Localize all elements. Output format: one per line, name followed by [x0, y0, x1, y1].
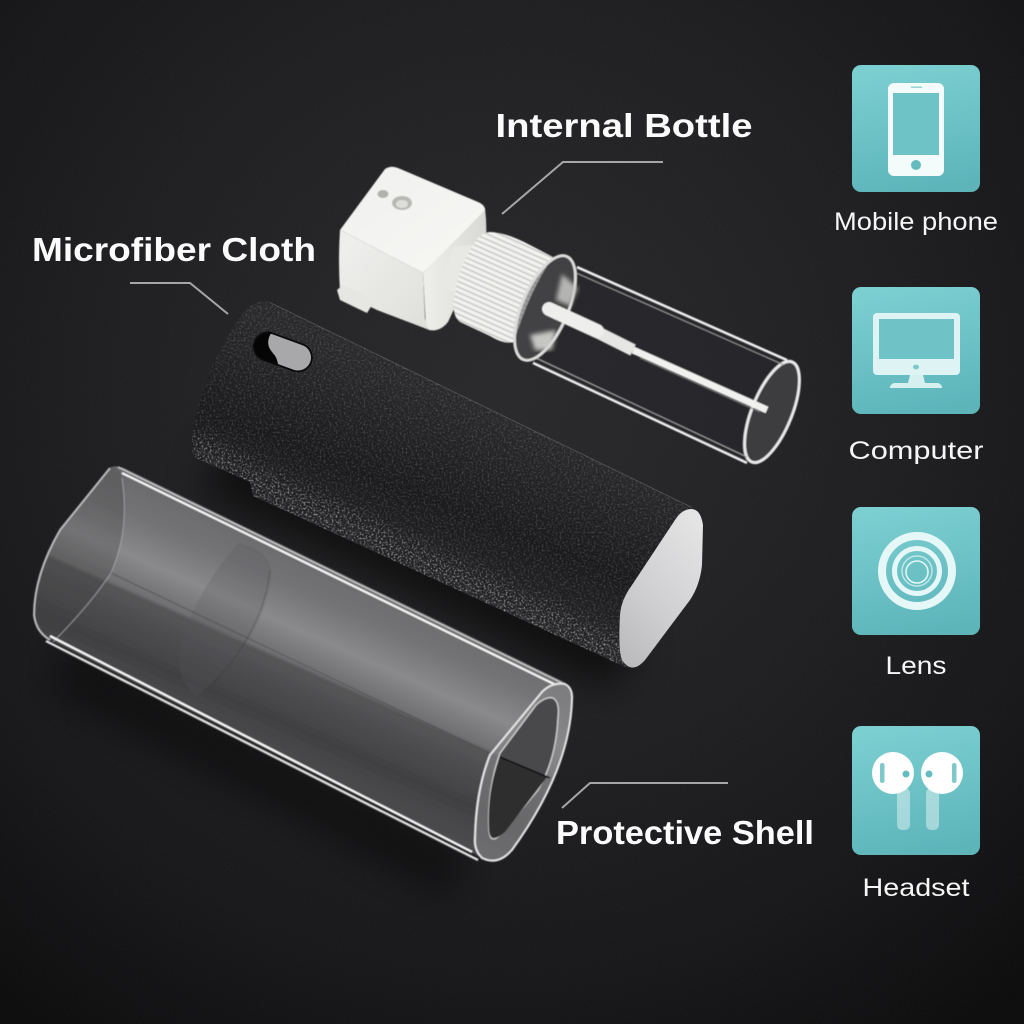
metal end cap — [619, 509, 703, 668]
device: mobile phone — [834, 65, 998, 236]
right side face — [423, 208, 486, 330]
protective shell label — [556, 783, 814, 851]
caption: Mobile phone — [834, 208, 998, 236]
dip straw — [633, 350, 767, 410]
open end — [475, 684, 572, 861]
shell body — [34, 466, 572, 861]
curved inner reflection — [179, 543, 271, 697]
caption: Headset — [862, 874, 970, 902]
caption: Lens — [886, 652, 946, 680]
spray holes — [392, 196, 412, 210]
left end darker panel — [34, 468, 124, 642]
edge lines — [118, 467, 562, 683]
pump head — [337, 167, 486, 331]
top face — [340, 167, 485, 273]
protective shell — [34, 466, 572, 900]
device: lens — [852, 507, 980, 680]
leader line: microfiber cloth — [130, 283, 228, 314]
clear tube — [533, 267, 811, 470]
ribbed cap — [454, 232, 553, 343]
tile — [852, 287, 980, 414]
centre ridge — [111, 573, 489, 753]
tile — [852, 507, 980, 635]
clear neck collar — [502, 247, 597, 369]
inner end curve — [53, 478, 124, 642]
microfiber cloth label — [32, 231, 316, 314]
internal bottle label: Internal Bottle — [496, 107, 752, 144]
microfiber cloth body — [180, 290, 710, 690]
icon: lens — [882, 536, 952, 606]
internal bottle — [337, 167, 811, 470]
icon: phone — [888, 83, 944, 176]
device: computer — [848, 287, 984, 465]
device: headset — [852, 726, 980, 902]
leader line: protective shell — [562, 783, 728, 808]
leader line: internal bottle — [502, 162, 663, 214]
tile — [852, 726, 980, 855]
protective shell label: Protective Shell — [556, 814, 814, 851]
clip tab — [337, 285, 372, 313]
front face — [339, 230, 432, 331]
pump stem — [441, 244, 480, 298]
tile — [852, 65, 980, 192]
caption: Computer — [848, 437, 984, 465]
lit lower edge — [192, 430, 626, 667]
oval window — [253, 332, 313, 372]
internal bottle label — [496, 107, 752, 214]
microfiber cloth label: Microfiber Cloth — [32, 231, 316, 268]
icon: monitor — [873, 313, 960, 388]
icon: earbuds — [872, 752, 963, 830]
